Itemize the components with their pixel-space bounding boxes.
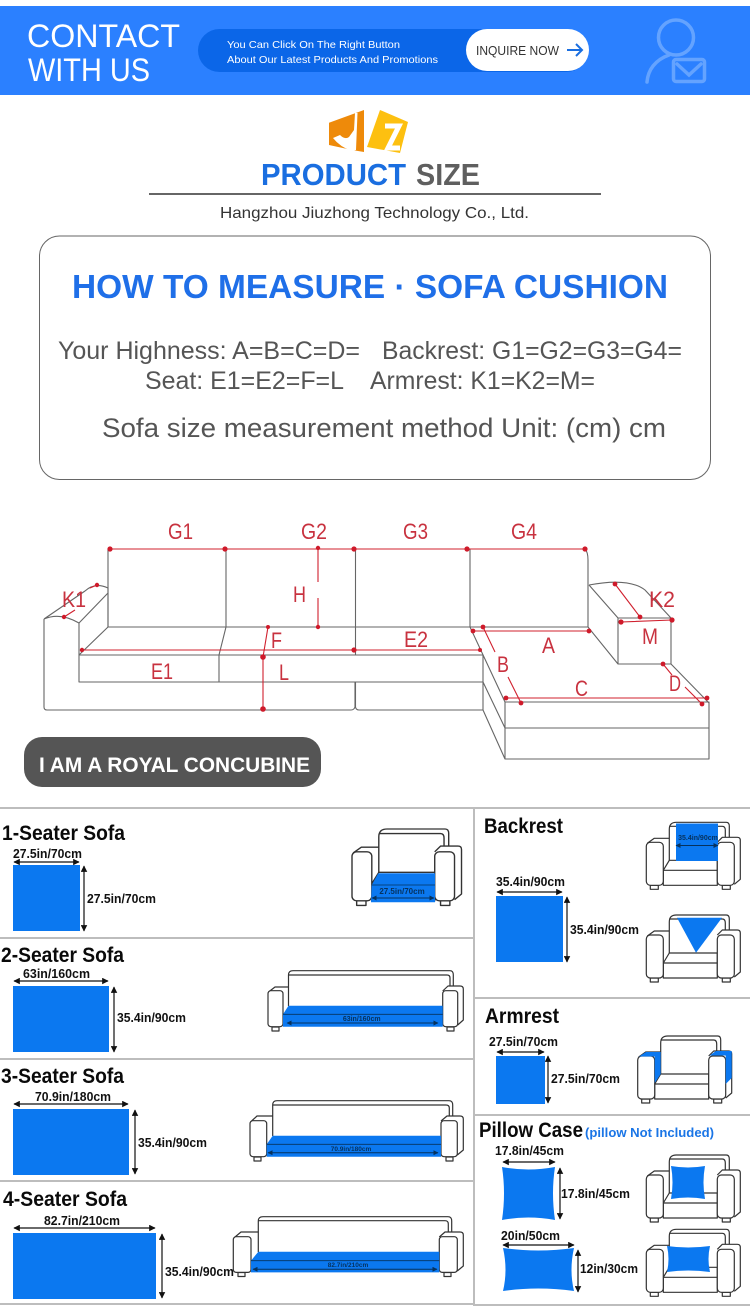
red measurement lines <box>62 546 709 712</box>
dimension letters: K2 <box>649 587 675 612</box>
sofa with blue seat <box>233 1217 463 1276</box>
armchair with blue backrest: 35.4in/90cm <box>678 835 718 842</box>
measurement formulas <box>58 337 682 443</box>
armchair with blue triangle <box>646 915 740 982</box>
rectangular pillow swatch <box>501 1229 638 1292</box>
logo: JZ <box>329 110 408 153</box>
fabric size swatch: 35.4in/90cm <box>165 1265 234 1279</box>
rectangular pillow swatch: 20in/50cm <box>501 1229 560 1243</box>
square pillow swatch: 17.8in/45cm <box>561 1187 630 1201</box>
banner heading: CONTACT <box>27 18 180 54</box>
fabric size swatch <box>13 967 186 1052</box>
size table grid <box>0 807 750 1306</box>
pillow note: (pillow Not Included) <box>585 1126 714 1140</box>
fabric size swatch: 27.5in/70cm <box>551 1072 620 1086</box>
armchair with rectangular pillow <box>646 1229 740 1296</box>
sofa with blue seat <box>268 971 463 1031</box>
fabric size swatch: 27.5in/70cm <box>13 847 82 861</box>
fabric size swatch: 35.4in/90cm <box>117 1011 186 1025</box>
fabric size swatch: 35.4in/90cm <box>496 875 565 889</box>
fabric size swatch <box>13 1214 234 1299</box>
armchair with blue backrest <box>646 822 740 889</box>
armchair with blue seat: 27.5in/70cm <box>379 887 425 896</box>
fabric size swatch: 70.9in/180cm <box>35 1090 111 1104</box>
dimension letters: B <box>497 652 509 677</box>
fabric size swatch <box>496 875 639 962</box>
armchair with blue arm covers <box>638 1036 732 1103</box>
panel: 3-seater sofa <box>1 1065 463 1175</box>
panel: 4-seater sofa <box>3 1188 463 1299</box>
title: product size <box>261 157 480 192</box>
sofa measurement diagram <box>44 519 709 759</box>
panel: armrest <box>485 1005 732 1104</box>
sofa outline <box>44 549 709 759</box>
title: product size: PRODUCT <box>261 157 406 192</box>
fabric size swatch: 35.4in/90cm <box>570 923 639 937</box>
icon: person with envelope <box>647 20 704 82</box>
dimension letters: K1 <box>62 587 86 612</box>
fabric size swatch <box>13 847 156 931</box>
measurement formulas: Armrest: K1=K2=M= <box>370 367 595 395</box>
fabric size swatch: 27.5in/70cm <box>489 1035 558 1049</box>
dimension letters: G1 <box>168 519 193 544</box>
panel: backrest <box>484 815 740 982</box>
measurement formulas: Sofa size measurement method Unit: (cm) cm <box>102 413 666 443</box>
title: product size: SIZE <box>416 157 480 192</box>
fabric size swatch <box>489 1035 620 1104</box>
dimension letters: E2 <box>404 627 428 652</box>
measurement formulas: Seat: E1=E2=F=L <box>145 367 344 395</box>
panel: pillow case: Pillow Case <box>479 1119 583 1142</box>
panel: 2-seater sofa <box>1 944 463 1052</box>
armchair with square pillow <box>646 1155 740 1222</box>
banner pill: You Can Click On The Right Button <box>227 39 400 51</box>
fabric size swatch: 27.5in/70cm <box>87 892 156 906</box>
panel: pillow case <box>479 1119 740 1296</box>
dimension letters: G2 <box>301 519 327 544</box>
badge: i am a royal concubine <box>24 737 321 787</box>
heading: sofa cushion: HOW TO MEASURE · SOFA CUSHION <box>72 268 668 305</box>
fabric size swatch: 82.7in/210cm <box>44 1214 120 1228</box>
dimension letters: M <box>642 624 658 649</box>
panel: 2-seater sofa: 2-Seater Sofa <box>1 944 124 967</box>
square pillow swatch: 17.8in/45cm <box>495 1144 564 1158</box>
panel: how to measure <box>40 236 710 480</box>
dimension letters: E1 <box>151 659 173 684</box>
contact banner <box>0 6 750 95</box>
panel: 1-seater sofa: 1-Seater Sofa <box>2 822 125 845</box>
fabric size swatch: 63in/160cm <box>23 967 90 981</box>
square pillow swatch <box>495 1144 630 1220</box>
panel: backrest: Backrest <box>484 815 563 838</box>
dimension letters: G3 <box>403 519 428 544</box>
sofa with blue seat: 63in/160cm <box>343 1016 381 1023</box>
fabric size swatch: 35.4in/90cm <box>138 1136 207 1150</box>
banner heading: WITH US <box>28 52 150 88</box>
banner pill: INQUIRE NOW <box>476 44 559 58</box>
dimension letters <box>62 519 681 701</box>
sofa with blue seat: 82.7in/210cm <box>328 1262 368 1269</box>
rectangular pillow swatch: 12in/30cm <box>580 1262 638 1276</box>
measurement formulas: Backrest: G1=G2=G3=G4= <box>382 337 682 365</box>
fabric size swatch <box>13 1090 207 1175</box>
banner heading <box>27 18 180 88</box>
dimension letters: A <box>542 633 555 658</box>
panel: 4-seater sofa: 4-Seater Sofa <box>3 1188 127 1211</box>
panel: 3-seater sofa: 3-Seater Sofa <box>1 1065 124 1088</box>
armchair with blue seat <box>352 829 462 905</box>
panel: 1-seater sofa <box>2 822 462 931</box>
badge: i am a royal concubine: I AM A ROYAL CONCUBINE <box>39 754 310 777</box>
dimension letters: F <box>271 628 282 653</box>
measurement formulas: Your Highness: A=B=C=D= <box>58 337 360 365</box>
banner pill: About Our Latest Products And Promotions <box>227 54 438 66</box>
dimension letters: C <box>575 676 588 701</box>
dimension letters: H <box>293 582 306 607</box>
dimension letters: L <box>279 660 289 685</box>
panel: armrest: Armrest <box>485 1005 559 1028</box>
dimension letters: D <box>669 671 681 696</box>
sofa with blue seat <box>250 1101 463 1161</box>
banner pill <box>198 29 589 72</box>
dimension letters: G4 <box>511 519 537 544</box>
company name: Hangzhou Jiuzhong Technology Co., Ltd. <box>220 205 529 222</box>
sofa with blue seat: 70.9in/180cm <box>331 1146 371 1153</box>
